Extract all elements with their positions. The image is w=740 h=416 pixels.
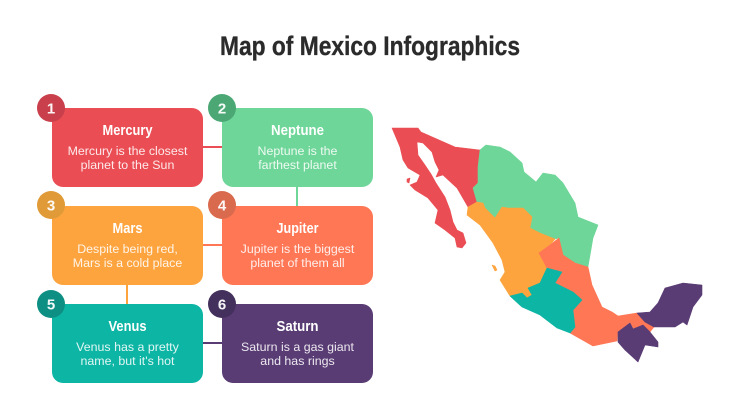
Neptune text: Neptune is the bbox=[258, 144, 338, 158]
badge 5 bbox=[37, 290, 65, 318]
badge 1 bbox=[37, 94, 65, 122]
map of Mexico bbox=[392, 128, 702, 362]
region: teal southwest bbox=[510, 268, 582, 333]
badge 6 bbox=[208, 290, 236, 318]
Saturn text: Saturn is a gas giant bbox=[241, 340, 355, 354]
panel: Mercury bbox=[37, 94, 203, 187]
panel: Jupiter bbox=[208, 191, 373, 285]
region: purple southeast bbox=[618, 283, 702, 362]
title: Map of Mexico Infographics bbox=[220, 31, 520, 61]
badge 2: 2 bbox=[218, 100, 226, 118]
connector: Venus to Saturn bbox=[203, 342, 222, 344]
panel: Neptune bbox=[208, 94, 373, 187]
connector: Mars to Jupiter bbox=[203, 244, 222, 246]
Jupiter text: Jupiter is the biggest bbox=[241, 242, 355, 256]
Mars heading: Mars bbox=[112, 220, 142, 237]
badge 5: 5 bbox=[47, 296, 55, 314]
badge 2 bbox=[208, 94, 236, 122]
Mars text: Despite being red, bbox=[77, 242, 178, 256]
Jupiter text: planet of them all bbox=[250, 256, 345, 270]
badge 6: 6 bbox=[218, 296, 226, 314]
Saturn text: and has rings bbox=[260, 354, 335, 368]
connector: Mercury to Neptune bbox=[203, 146, 222, 148]
panel: Saturn bbox=[208, 290, 373, 383]
badge 1: 1 bbox=[47, 100, 55, 118]
Venus heading: Venus bbox=[108, 318, 146, 335]
badge 3: 3 bbox=[47, 198, 55, 214]
badge 3 bbox=[37, 191, 65, 219]
Mars text: Mars is a cold place bbox=[73, 256, 182, 270]
region: red northwest bbox=[392, 128, 480, 248]
Neptune text: farthest planet bbox=[258, 158, 337, 172]
Mercury heading: Mercury bbox=[102, 122, 153, 139]
badge 4 bbox=[208, 191, 236, 219]
connector: Mars to Venus bbox=[126, 285, 128, 304]
Neptune heading: Neptune bbox=[271, 122, 324, 139]
region: orange west bbox=[467, 202, 555, 298]
Saturn heading: Saturn bbox=[276, 318, 318, 335]
Jupiter heading: Jupiter bbox=[276, 220, 319, 237]
region: green north bbox=[473, 145, 598, 267]
region: coral centre and south bbox=[539, 238, 654, 346]
Venus text: name, but it's hot bbox=[81, 354, 175, 368]
panel: Mars bbox=[37, 191, 203, 285]
Mercury text: planet to the Sun bbox=[81, 158, 174, 172]
Mercury text: Mercury is the closest bbox=[68, 144, 188, 158]
badge 4: 4 bbox=[218, 198, 227, 214]
Venus text: Venus has a pretty bbox=[76, 340, 180, 354]
panel: Venus bbox=[37, 290, 203, 383]
connector: Neptune to Jupiter bbox=[296, 187, 298, 206]
